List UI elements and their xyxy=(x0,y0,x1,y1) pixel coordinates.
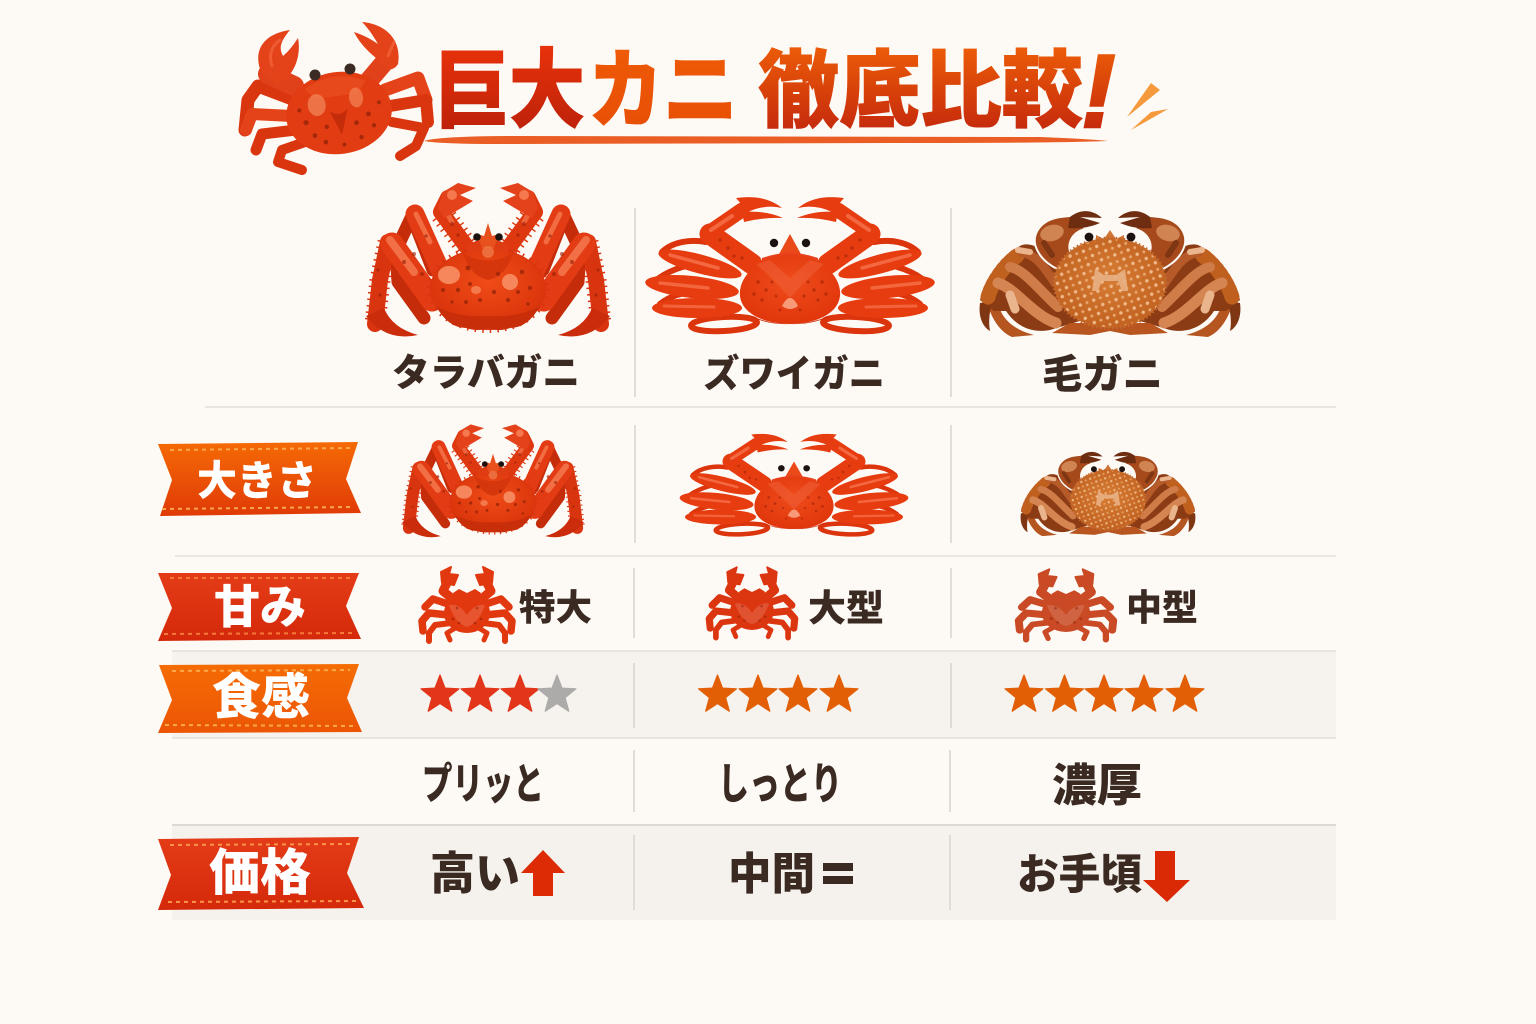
ribbon label: 価格 xyxy=(158,837,364,910)
title: 巨大カニ 徹底比較!: 巨大 xyxy=(433,43,585,139)
rating: 5 stars xyxy=(1005,675,1204,711)
value: 大型: 大型 xyxy=(808,588,884,629)
ribbon label: 甘み: 甘み xyxy=(214,581,306,633)
title crab illustration xyxy=(245,22,428,170)
ribbon label: 食感 xyxy=(158,664,362,733)
ribbon label: 大きさ: 大きさ xyxy=(197,458,317,504)
column header: タラバガニ xyxy=(366,183,610,395)
value: 中型: 中型 xyxy=(1126,587,1198,628)
value: お手頃 with down arrow xyxy=(1017,851,1190,902)
column header: 毛ガニ xyxy=(980,211,1240,397)
title: 巨大カニ 徹底比較!: ! xyxy=(1081,34,1116,150)
value: 特大 xyxy=(422,567,592,641)
value: 特大: 特大 xyxy=(519,587,592,628)
rating: 3 of 4 stars xyxy=(421,675,576,711)
value: 高い with up arrow xyxy=(430,848,565,899)
column header: ズワイガニ xyxy=(644,197,936,396)
value: 中型 xyxy=(1019,569,1198,640)
title underline swash xyxy=(424,136,1108,144)
value: 大型 xyxy=(709,567,884,638)
value: お手頃 with down arrow: お手頃 xyxy=(1017,851,1142,898)
table row backgrounds and rules xyxy=(172,208,1336,920)
value: 濃厚: 濃厚 xyxy=(1052,760,1142,811)
size row: 毛ガニ crab xyxy=(1021,452,1195,536)
size row: タラバガニ crab xyxy=(402,424,584,537)
column header: ズワイガニ: ズワイガニ xyxy=(703,353,885,396)
title: 巨大カニ 徹底比較! xyxy=(433,34,1116,150)
ribbon label: 食感: 食感 xyxy=(212,671,310,725)
column header: 毛ガニ: 毛ガニ xyxy=(1042,353,1163,397)
icon: exclamation sparks xyxy=(1127,83,1168,130)
title: 巨大カニ 徹底比較!: カニ xyxy=(588,43,738,139)
value: 高い with up arrow: 高い xyxy=(430,848,520,899)
column header: タラバガニ: タラバガニ xyxy=(392,353,580,395)
value: 中間 with equals: 中間 xyxy=(728,850,815,899)
ribbon label: 大きさ xyxy=(158,442,361,516)
value: プリッと: プリッと xyxy=(422,761,544,809)
size row: ズワイガニ crab xyxy=(679,434,909,536)
ribbon label: 価格: 価格 xyxy=(209,845,311,901)
ribbon label: 甘み xyxy=(158,573,361,641)
title: 巨大カニ 徹底比較!: 徹底比較 xyxy=(758,44,1083,138)
value: しっとり: しっとり xyxy=(718,761,842,809)
rating: 4 stars xyxy=(698,675,858,711)
